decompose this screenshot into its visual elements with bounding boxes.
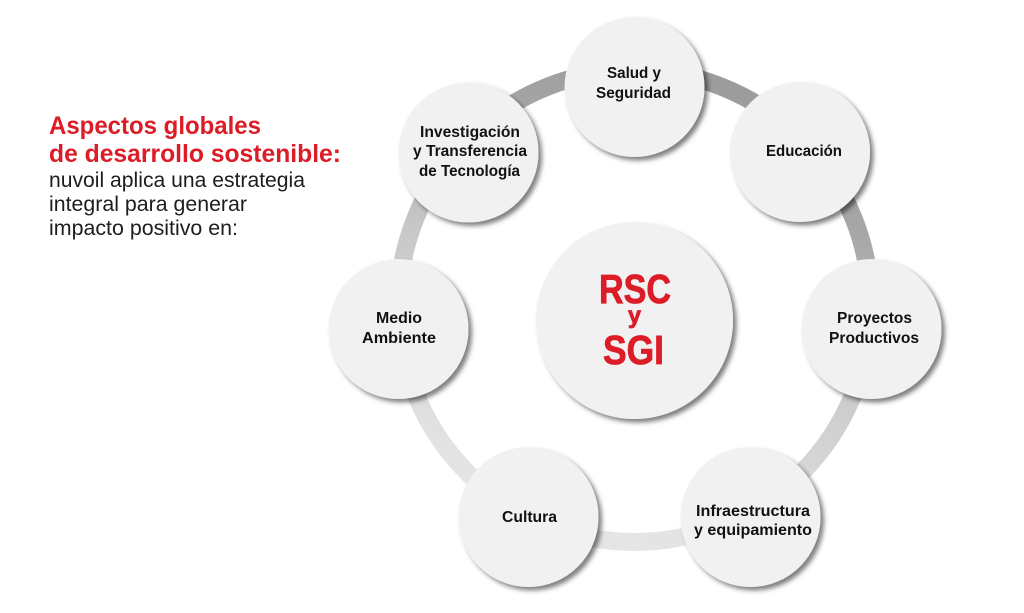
node: Medio Ambiente: Ambiente (362, 330, 436, 347)
node: Infraestructura y equipamiento: Infraestructura (696, 503, 810, 520)
center circle: RSC y SGI (536, 222, 733, 419)
node: Educación: Educación (766, 143, 842, 160)
node: Medio Ambiente: Medio (376, 310, 422, 327)
node: Proyectos Productivos (802, 259, 942, 399)
description text: nuvoil aplica una estrategia (49, 168, 305, 192)
node: Proyectos Productivos: Productivos (829, 330, 919, 347)
heading: de desarrollo sostenible: (49, 140, 341, 168)
node: Educación (730, 82, 870, 222)
center circle: RSC y SGI: y (628, 302, 641, 328)
description text: integral para generar (49, 192, 247, 216)
description text (49, 168, 305, 240)
node: Cultura: Cultura (502, 509, 557, 526)
node: Cultura (458, 447, 598, 587)
heading (49, 112, 341, 168)
node: Salud y Seguridad: Seguridad (596, 85, 671, 102)
center circle: RSC y SGI: RSC (599, 266, 671, 312)
description text: impacto positivo en: (49, 216, 238, 240)
node: Medio Ambiente (328, 259, 468, 399)
node: Infraestructura y equipamiento (680, 447, 820, 587)
node: Investigación y Transferencia de Tecnología: y Transferencia (413, 143, 527, 160)
intro text block (49, 112, 341, 240)
node: Investigación y Transferencia de Tecnología: de Tecnología (419, 163, 520, 180)
heading: Aspectos globales (49, 112, 261, 140)
node: Proyectos Productivos: Proyectos (837, 310, 912, 327)
node: Infraestructura y equipamiento: y equipamiento (694, 522, 812, 539)
node: Investigación y Transferencia de Tecnología (398, 82, 538, 222)
connecting ring (398, 70, 870, 542)
node: Salud y Seguridad: Salud y (607, 65, 661, 82)
node: Investigación y Transferencia de Tecnología: Investigación (420, 124, 520, 141)
center circle: RSC y SGI: SGI (603, 327, 664, 373)
node: Salud y Seguridad (564, 17, 704, 157)
